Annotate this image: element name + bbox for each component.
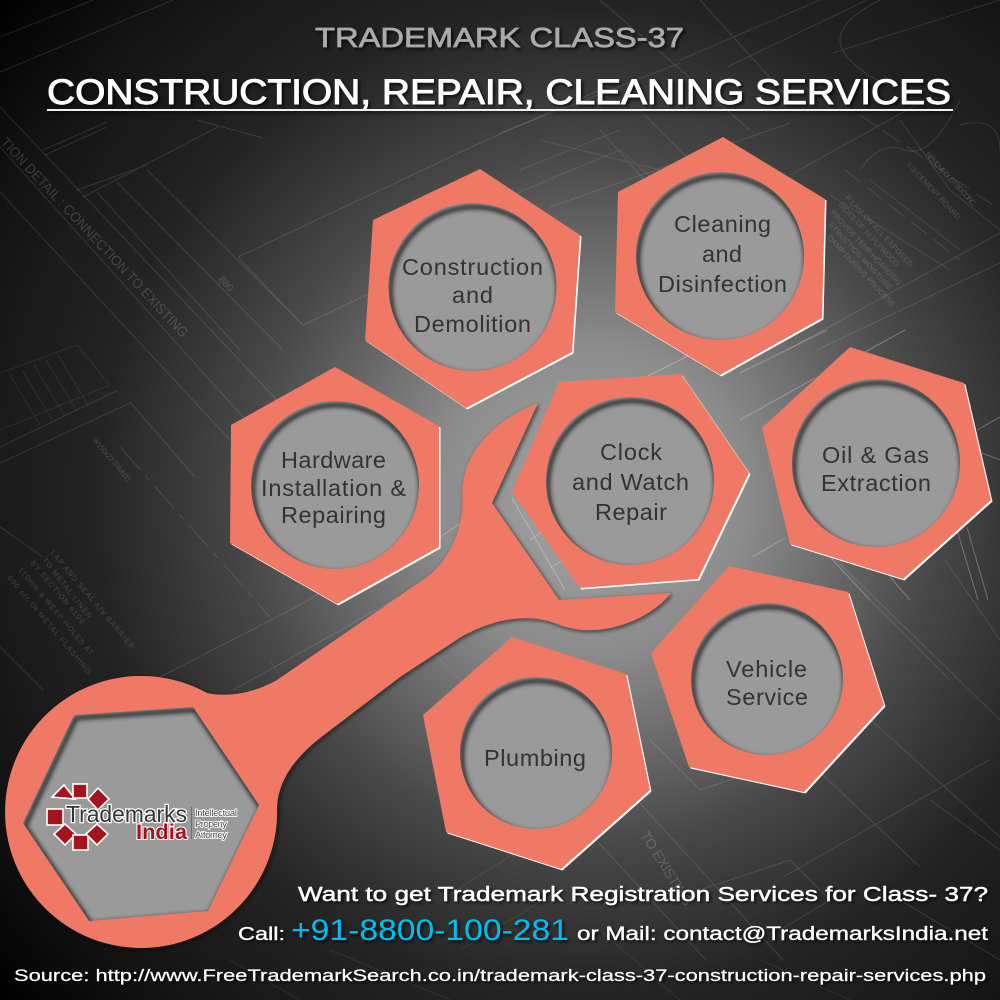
background: blueprint annotation text: 110mm ø WEEP HOLES AT [16,566,96,657]
label: and Watch [572,469,689,495]
hexagon: cleaning and disinfection [615,137,826,376]
label: Installation & [261,475,406,501]
logo tagline [191,807,237,841]
logo tagline: Property [195,819,227,830]
label: Repairing [281,502,386,528]
label: Repair [595,499,667,525]
hexagon: clock and watch repair [512,374,750,590]
contact line: Call: [238,924,285,944]
label: Hardware [281,447,386,473]
background: blueprint annotation text: DAMP DURING PROCESS [826,233,897,309]
background: blueprint annotation text: LAP AND SEAL A/V BARRIER [48,549,137,651]
hexagon: hardware installation and repairing [230,367,440,606]
label [821,442,931,496]
logo: trademarks india [47,784,237,850]
heading: construction, repair, cleaning services: CONSTRUCTION, REPAIR, CLEANING SERVICES [47,73,951,112]
hexagon: vehicle service [651,566,886,794]
title: trademark class: TRADEMARK CLASS-37 [315,22,684,53]
source url: Source: http://www.FreeTrademarkSearch.co.in/trademark-class-37-construction-repair-services.php [14,966,986,985]
logo wordmark: Trademarks [66,801,187,827]
hexagon: oil and gas extraction [762,347,992,580]
label [658,211,787,297]
logo india: India [136,821,187,844]
label: and [702,241,742,267]
wrench body [5,403,671,948]
background: blueprint annotation text: TO METAL LINER [40,556,94,621]
hexagon: plumbing [423,637,652,870]
label: Plumbing [484,745,586,771]
background: blueprint annotation text: TION DETAIL : CONNECTION TO EXISTING [0,134,192,340]
phone number: +91-8800-100-281 [291,914,569,947]
background: blueprint annotation text: W150x22 (PAINT) [90,436,133,484]
label: Disinfection [658,271,787,297]
background: blueprint annotation text [0,134,978,909]
email: or Mail: contact@TrademarksIndia.net [577,924,989,945]
background: blueprint annotation text: STRUCTION MOISTURE [827,220,894,292]
label: Oil & Gas [822,442,929,468]
label: Cleaning [674,211,771,237]
background: blueprint annotation text: SIDES OF 18 PLYWOOD [837,200,901,269]
background: blueprint annotation text: PROVIDE TEMP HOARDING [829,208,903,288]
logo tagline: Intellectual [195,808,237,819]
hexagon: construction and demolition [365,169,582,410]
background: blueprint annotation text: REMOVE DUST BD CONC [924,150,978,208]
background: blueprint annotation text: 1:3 CEMENT BOARD [905,160,963,222]
label [572,439,689,525]
label [402,254,543,337]
background: blueprint annotation text: TO EXISTING [637,828,696,909]
label: Service [726,684,808,710]
background: blueprint annotation text: 880 [216,275,236,295]
wrench graphic [5,403,671,948]
background: blueprint annotation text: BY SECTION 6100 [28,559,87,626]
label [261,447,406,528]
wrench socket [23,707,261,924]
label: and [452,282,493,308]
call to action text: Want to get Trademark Registration Services for Class- 37? [298,884,988,906]
label: Extraction [821,470,931,496]
label: Vehicle [726,656,807,682]
label: Clock [600,439,662,465]
logo mark [47,784,109,850]
background: blueprint annotation text: 600 c/c IN METAL FLASHING [5,574,93,676]
label: Construction [402,254,543,280]
logo tagline: Attorney [195,830,227,841]
label: Demolition [414,311,531,337]
background: blueprint annotation text: P.LAM ON ALL EXPOSED [844,193,915,269]
label [726,656,808,710]
contact line [238,914,989,947]
